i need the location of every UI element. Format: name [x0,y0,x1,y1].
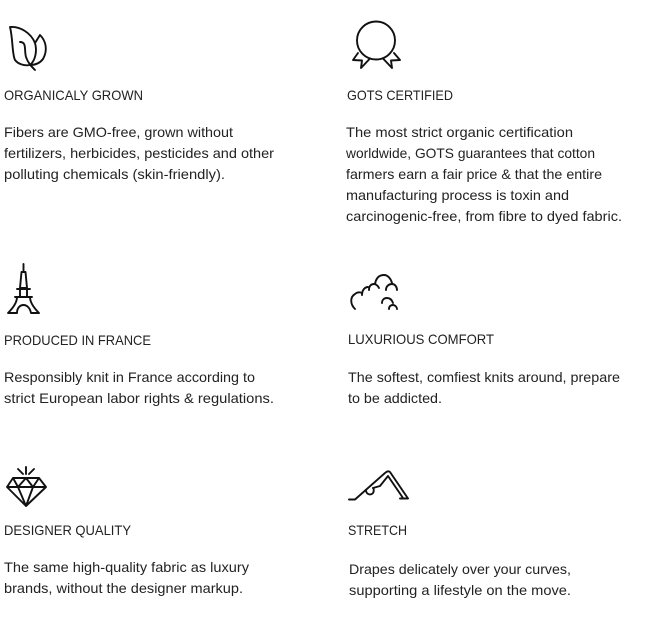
text block: The most strict organic certification [346,124,573,140]
panel: organically grown [4,27,274,182]
text block: strict European labor rights & regulations. [4,390,274,406]
text block [4,124,274,182]
text block: The softest, comfiest knits around, prepare [348,369,620,385]
text block: manufacturing process is toxin and [346,187,569,203]
text block [4,369,274,406]
icon: stretching figure [349,471,408,500]
text block: fertilizers, herbicides, pesticides and other [4,145,274,161]
heading: DESIGNER QUALITY [4,522,132,538]
heading: PRODUCED IN FRANCE [4,332,151,348]
text block: Responsibly knit in France according to [4,369,255,385]
text block: brands, without the designer markup. [4,580,243,596]
heading: ORGANICALY GROWN [4,87,143,103]
panel: designer quality [4,467,249,596]
icon: medal [353,22,400,68]
icon: diamond [7,467,46,506]
text block: worldwide, GOTS guarantees that cotton [345,145,595,161]
text block: to be addicted. [348,390,442,406]
text block: The same high-quality fabric as luxury [4,559,249,575]
icon: Eiffel tower [8,264,39,313]
heading: STRETCH [348,522,407,538]
panel: stretch [348,471,571,598]
text block: Fibers are GMO-free, grown without [4,124,233,140]
text block [4,559,249,596]
text block: Drapes delicately over your curves, [349,561,571,577]
text block [348,369,620,406]
icon: cloud [351,275,397,309]
icon: leaf [10,27,46,70]
text block [349,561,571,598]
panel: luxurious comfort [348,275,620,406]
panel: produced in France [4,264,274,406]
heading: GOTS CERTIFIED [347,87,453,103]
text block: farmers earn a fair price & that the entire [346,166,602,182]
text block: supporting a lifestyle on the move. [349,582,571,598]
text block [345,124,622,224]
text block: polluting chemicals (skin-friendly). [4,166,225,182]
text block: carcinogenic-free, from fibre to dyed fabric. [346,208,622,224]
heading: LUXURIOUS COMFORT [348,331,494,347]
panel: GOTS certified [345,22,622,224]
